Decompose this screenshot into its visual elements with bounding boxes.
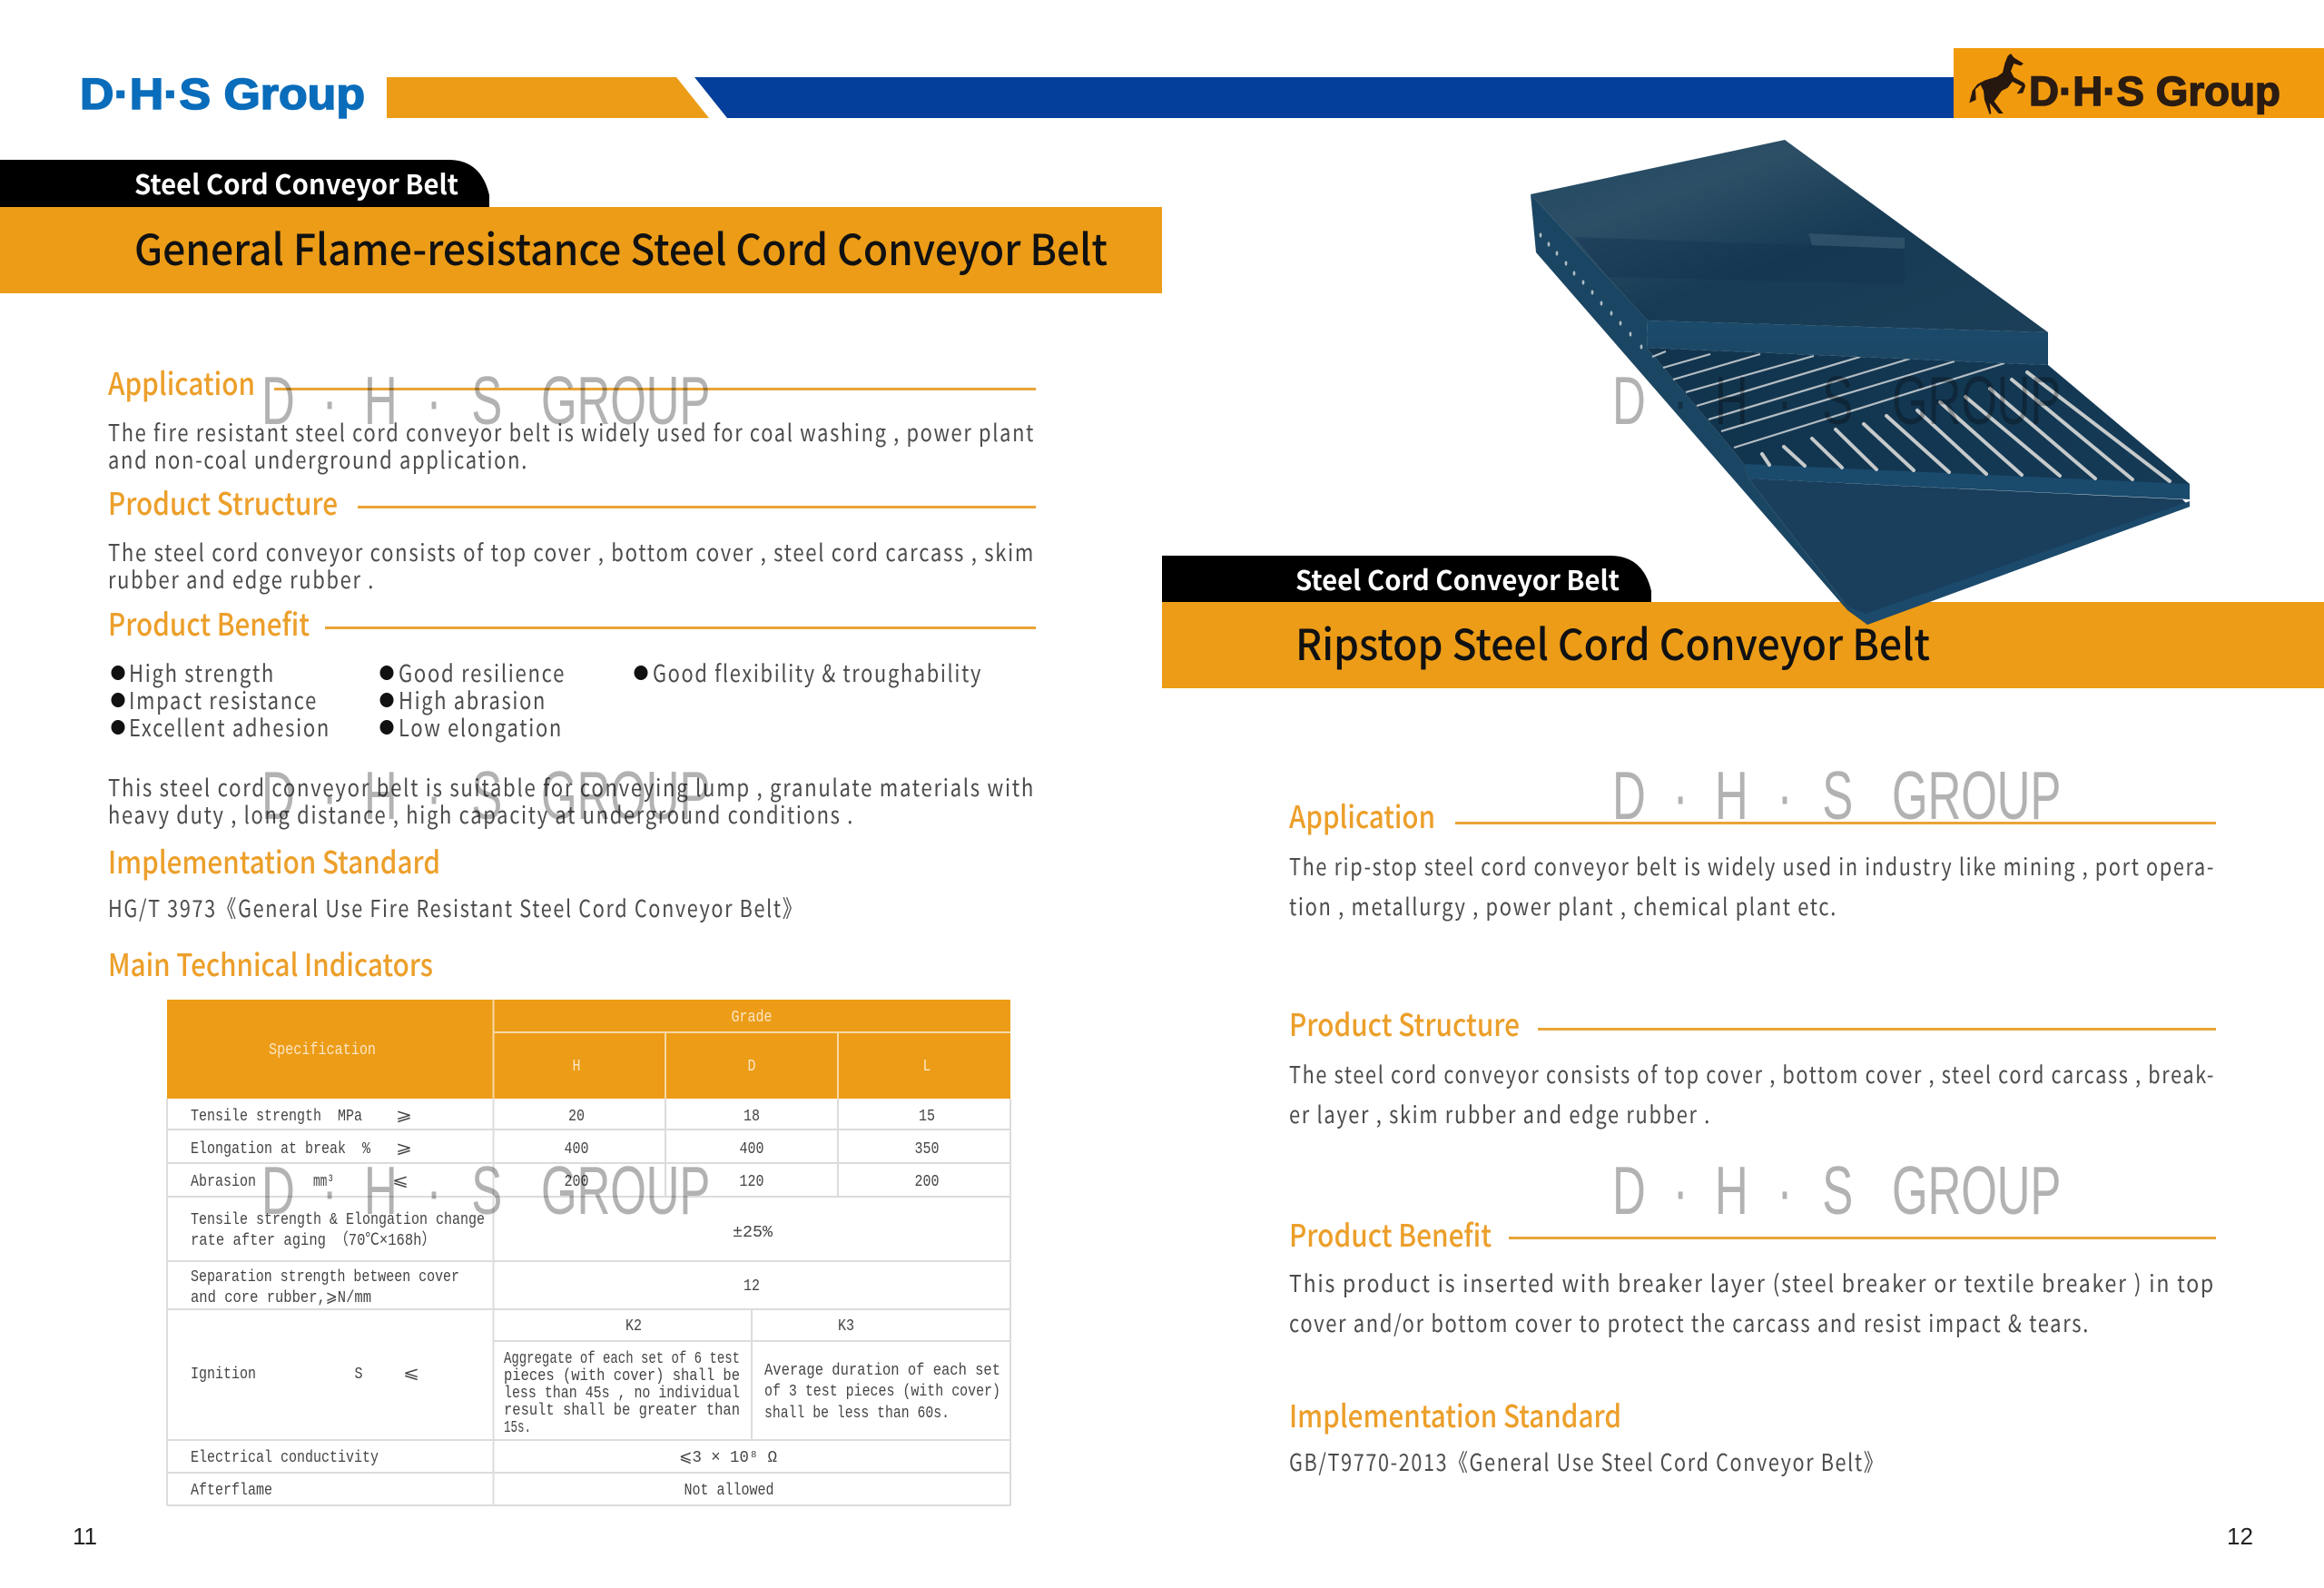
heading: Product Structure: Product Structure <box>1289 1001 1520 1045</box>
table row: elongation: 400 <box>739 1140 764 1159</box>
table row: separation: and core rubber,⩾N/mm <box>191 1289 371 1307</box>
text block: suitability: heavy duty , long distance , high capacity at underground conditions . <box>108 797 854 831</box>
table row: separation: Separation strength between cover <box>191 1268 459 1287</box>
cord layer background <box>1647 348 2190 498</box>
edge cord dots <box>1540 232 1642 350</box>
table header <box>167 1000 1010 1099</box>
table row: ignition: Ignition <box>191 1366 256 1384</box>
table row: electrical conductivity: Electrical conductivity <box>191 1449 379 1467</box>
watermarks: D · H · S GROUP <box>1612 757 2061 833</box>
main title: Ripstop Steel Cord Conveyor Belt <box>1295 610 1930 673</box>
table row: aging: ±25% <box>733 1224 773 1242</box>
page number 11: 11 <box>73 1523 97 1550</box>
text block: application <box>108 415 1035 476</box>
table row: separation: 12 <box>743 1277 760 1296</box>
table row: tensile strength <box>191 1108 935 1126</box>
text block: product benefit: This product is inserted with breaker layer (steel breaker or textile breaker ) in top <box>1289 1266 2215 1299</box>
orange bar segment <box>387 77 709 118</box>
watermarks: D · H · S GROUP <box>261 757 710 833</box>
heading: Application: Application <box>1289 793 1435 837</box>
panel: left page content <box>108 360 1036 985</box>
table row: afterflame <box>191 1482 773 1500</box>
bottom cover surface <box>1748 478 2190 625</box>
table row: tensile strength: 20 <box>568 1108 585 1126</box>
bullet list: benefits: Low elongation <box>399 710 563 744</box>
heading: Application <box>1289 793 2216 837</box>
watermarks: D · H · S GROUP <box>1612 362 2061 439</box>
black tab <box>0 160 489 207</box>
table row: tensile strength: 18 <box>743 1108 760 1126</box>
illustration: ripstop conveyor belt cross-section <box>1531 140 2190 625</box>
heading: Product Benefit <box>1289 1211 2216 1256</box>
heading: Application: Application <box>108 360 255 404</box>
bullet list: benefits: Excellent adhesion <box>129 710 330 744</box>
table row: elongation: 400 <box>565 1140 588 1159</box>
text block: standard: GB/T9770-2013《General Use Steel Cord Conveyor Belt》 <box>1289 1445 1885 1478</box>
table row: ignition: K3 <box>838 1317 854 1336</box>
heading: Product Structure: Product Structure <box>108 479 338 524</box>
table row: ignition: Average duration of each set <box>764 1362 1000 1380</box>
bottom edge strip <box>1847 501 2190 625</box>
text block: product benefit: cover and/or bottom cover to protect the carcass and resist impact & tears. <box>1289 1306 2090 1339</box>
table row: ignition: ⩽ <box>403 1366 419 1384</box>
table row: tensile strength: ⩾ <box>396 1108 412 1126</box>
text block: application: The fire resistant steel cord conveyor belt is widely used for coal washing , power plant <box>108 415 1035 449</box>
left edge strip <box>1531 194 1867 625</box>
table row: aging: rate after aging （70℃×168h） <box>191 1230 436 1250</box>
logo: D.H.S Group blue: D·H·S Group <box>80 71 365 119</box>
table header: Grade <box>732 1009 772 1027</box>
table grid <box>167 1099 1010 1505</box>
table row: ignition: S <box>354 1366 363 1384</box>
watermarks: D · H · S GROUP <box>1612 1152 2061 1228</box>
text block: product structure: rubber and edge rubber . <box>108 562 375 596</box>
heading: Product Benefit: Product Benefit <box>1289 1211 1492 1256</box>
table row: ignition: less than 45s , no individual <box>504 1385 740 1403</box>
text block: product structure <box>108 535 1035 596</box>
text block: product structure: er layer , skim rubber and edge rubber . <box>1289 1097 1711 1130</box>
table row: afterflame: Not allowed <box>684 1482 773 1500</box>
text block: application: and non-coal underground application. <box>108 442 528 476</box>
text block: suitability <box>108 770 1035 831</box>
table row: afterflame: Afterflame <box>191 1482 272 1500</box>
text block: suitability: This steel cord conveyor belt is suitable for conveying lump , granulate materials with <box>108 770 1035 804</box>
watermarks <box>261 362 2061 1228</box>
tab label: Steel Cord Conveyor Belt <box>134 163 458 202</box>
bullet list: benefits <box>111 656 982 744</box>
transverse breaker cords <box>1652 351 2004 448</box>
section banner: right page title <box>1162 556 2324 688</box>
watermarks: D · H · S GROUP <box>261 362 710 439</box>
table row: aging: Tensile strength & Elongation change <box>191 1211 485 1229</box>
blue bar segment <box>694 77 1954 118</box>
watermarks: D · H · S GROUP <box>261 1152 710 1228</box>
panel: right page content <box>1289 793 2216 1478</box>
heading: Application <box>108 360 1036 404</box>
table header: H <box>572 1058 581 1076</box>
table row: electrical conductivity: ⩽3 × 10⁸ Ω <box>679 1449 777 1467</box>
heading: Product Structure <box>108 479 1036 524</box>
table row: ignition: K2 <box>625 1317 642 1336</box>
table row: elongation: ⩾ <box>396 1140 412 1159</box>
table row: abrasion: 120 <box>739 1173 764 1191</box>
table row: elongation: Elongation at break <box>191 1140 346 1159</box>
table row: electrical conductivity <box>191 1449 777 1467</box>
breaker layer edge <box>1745 464 2190 499</box>
text block: product structure <box>1289 1057 2215 1130</box>
table row: ignition: Aggregate of each set of 6 test <box>504 1350 740 1368</box>
text block: product structure: The steel cord conveyor consists of top cover , bottom cover , steel cord carcass , skim <box>108 535 1035 568</box>
table row: ignition <box>191 1317 1000 1437</box>
table row: abrasion: Abrasion <box>191 1173 256 1191</box>
top cover surface <box>1531 140 2048 332</box>
table row: abrasion: mm³ <box>313 1173 334 1191</box>
heading: Product Structure <box>1289 1001 2216 1045</box>
table header: D <box>748 1058 755 1076</box>
table: main technical indicators <box>167 1000 1010 1505</box>
table row: ignition: of 3 test pieces (with cover) <box>764 1383 1000 1401</box>
table row: abrasion: ⩽ <box>392 1173 409 1191</box>
heading: Product Benefit <box>108 600 1036 645</box>
table row: ignition: pieces (with cover) shall be <box>504 1367 740 1386</box>
table row: tensile strength: 15 <box>919 1108 935 1126</box>
text block: standard: HG/T 3973《General Use Fire Resistant Steel Cord Conveyor Belt》 <box>108 891 803 924</box>
logo text: D·H·S Group <box>2029 68 2280 114</box>
orange title band <box>0 207 1162 293</box>
table row: elongation: % <box>362 1140 370 1159</box>
heading: Implementation Standard: Implementation Standard <box>108 838 440 883</box>
table header: L <box>922 1058 931 1076</box>
bullet list: benefits: Good flexibility & troughability <box>653 656 982 689</box>
text block: product benefit <box>1289 1266 2215 1339</box>
section banner: left page title <box>0 160 1162 293</box>
top cover front face <box>1647 321 2048 365</box>
heading: Implementation Standard: Implementation Standard <box>1289 1392 1621 1436</box>
main title: General Flame-resistance Steel Cord Conveyor Belt <box>134 215 1108 278</box>
table row: abrasion: 200 <box>915 1173 939 1191</box>
heading: Product Benefit: Product Benefit <box>108 600 310 645</box>
table row: elongation <box>191 1140 939 1159</box>
bullet list: benefits: High abrasion <box>399 683 547 716</box>
table row: aging <box>191 1211 773 1250</box>
logo box: horse and D.H.S Group <box>1954 48 2324 118</box>
bullet list: benefits: High strength <box>129 656 275 689</box>
tab label: Steel Cord Conveyor Belt <box>1295 558 1620 598</box>
table row: ignition: 15s. <box>504 1419 531 1437</box>
table row: abrasion: 200 <box>565 1173 588 1191</box>
longitudinal steel cords <box>1762 372 2170 481</box>
table row: tensile strength: Tensile strength <box>191 1108 321 1126</box>
table header: Specification <box>269 1041 376 1060</box>
orange title band <box>1162 602 2324 688</box>
reflection shadow <box>1574 237 1905 284</box>
table row: tensile strength: MPa <box>338 1108 362 1126</box>
bullet list: benefits: Good resilience <box>399 656 566 689</box>
text block: application: tion , metallurgy , power plant , chemical plant etc. <box>1289 889 1837 922</box>
table row: ignition: shall be less than 60s. <box>764 1405 950 1423</box>
reflection highlight <box>1808 233 1905 249</box>
black tab <box>1162 556 1651 602</box>
table row: abrasion <box>191 1173 939 1191</box>
bullet list: benefits: Impact resistance <box>129 683 318 716</box>
page number 12: 12 <box>2227 1523 2253 1550</box>
table row: separation <box>191 1268 760 1307</box>
text block: application <box>1289 849 2215 922</box>
icon: rearing horse <box>1969 54 2025 114</box>
header: top brand bar <box>80 48 2324 119</box>
heading: Main Technical Indicators: Main Technical Indicators <box>108 941 433 985</box>
table row: elongation: 350 <box>915 1140 939 1159</box>
table row: ignition: result shall be greater than <box>504 1402 740 1420</box>
